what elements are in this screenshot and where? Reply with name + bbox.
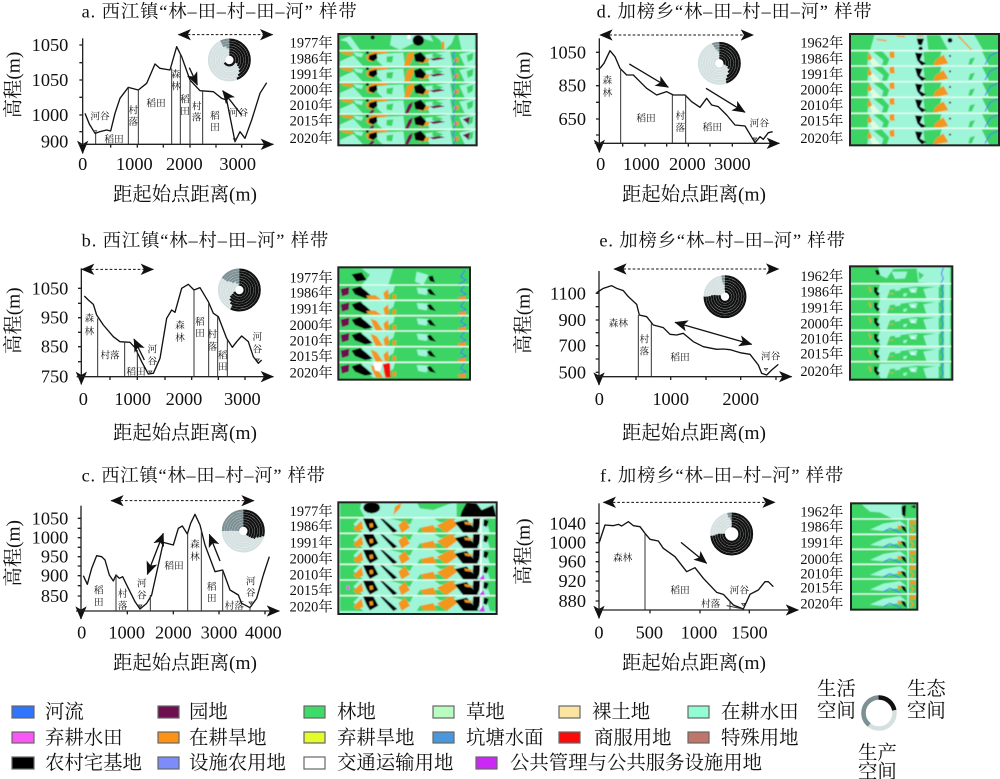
elevation profile b: 稻 bbox=[195, 317, 205, 328]
axes b: 高程(m) bbox=[2, 287, 24, 354]
axes c: 4000 bbox=[245, 622, 282, 642]
axes d: 距起始点距离(m) bbox=[622, 184, 766, 206]
legend: land use types bbox=[12, 701, 799, 774]
axes e: 1100 bbox=[550, 283, 586, 303]
axes e: 700 bbox=[558, 336, 586, 356]
elevation profile d: 林 bbox=[603, 87, 613, 99]
circular chart c bbox=[223, 511, 264, 551]
elevation profile b: 谷 bbox=[148, 356, 158, 367]
year labels c bbox=[290, 502, 333, 616]
year labels a: 1986年 bbox=[290, 49, 333, 67]
elevation profile b bbox=[84, 284, 263, 378]
axes c: 1000 bbox=[32, 528, 68, 548]
elevation profile e: 森林 bbox=[609, 318, 628, 330]
axes c bbox=[2, 506, 282, 674]
axes b: 3000 bbox=[224, 389, 261, 409]
elevation profile d: 稻田 bbox=[703, 123, 722, 134]
legend: land use types: 弃耕水田 bbox=[45, 727, 123, 749]
axes c: 高程(m) bbox=[2, 520, 24, 587]
elevation profile e: 村 bbox=[640, 334, 650, 346]
year labels b: 1986年 bbox=[290, 284, 333, 302]
year labels e bbox=[800, 267, 843, 380]
elevation profile f: 河谷 bbox=[730, 585, 749, 596]
year labels a: 1991年 bbox=[290, 65, 333, 83]
panel b: 西江镇 林村田河 transect bbox=[2, 231, 470, 444]
elevation profile a: 村 bbox=[129, 104, 139, 116]
elevation profile a: 河谷 bbox=[90, 111, 110, 122]
elevation profile c: 河 bbox=[137, 579, 147, 590]
axes c: 3000 bbox=[201, 622, 237, 642]
year labels e: 1991年 bbox=[800, 298, 843, 316]
year labels c: 2010年 bbox=[290, 565, 333, 583]
year labels b: 1977年 bbox=[290, 268, 333, 286]
axes c: 950 bbox=[41, 547, 68, 567]
legend: land use types: 在耕水田 bbox=[721, 701, 799, 723]
elevation profile e: 落 bbox=[640, 345, 650, 357]
panel d: 加榜乡 林田村田河 transect bbox=[512, 1, 999, 206]
elevation profile b: 稻田 bbox=[126, 367, 146, 378]
year labels f: 2000年 bbox=[800, 550, 843, 568]
legend: space ring bbox=[817, 678, 946, 779]
year labels d: 2015年 bbox=[800, 112, 843, 130]
legend: land use types: 弃耕旱地 bbox=[337, 727, 415, 749]
elevation profile d: 森 bbox=[603, 74, 613, 86]
elevation profile d: 河谷 bbox=[750, 119, 769, 130]
elevation profile d: 落 bbox=[676, 122, 686, 134]
year labels f: 2015年 bbox=[800, 579, 843, 597]
elevation profile d: 村 bbox=[676, 110, 686, 122]
year labels d: 1986年 bbox=[800, 49, 843, 67]
axes c: 900 bbox=[41, 566, 68, 586]
axes e: 1000 bbox=[652, 389, 689, 409]
elevation profile a bbox=[85, 47, 267, 145]
elevation profile c: 河 bbox=[246, 576, 256, 587]
land use map a bbox=[338, 33, 477, 146]
axes f: 1000 bbox=[549, 533, 586, 553]
panel f: 加榜乡 林田村河 transect bbox=[512, 466, 917, 674]
axes d: 650 bbox=[558, 109, 586, 129]
year labels b: 2015年 bbox=[290, 347, 333, 365]
axes c: 2000 bbox=[155, 622, 192, 642]
year labels e: 2000年 bbox=[800, 314, 843, 332]
elevation profile a: 河谷 bbox=[229, 108, 248, 119]
year labels d: 1962年 bbox=[800, 34, 843, 52]
year labels d: 2000年 bbox=[800, 80, 843, 98]
title d: d. 加榜乡“林–田–村–田–河” 样带 bbox=[597, 1, 872, 21]
elevation profile b: 落 bbox=[208, 341, 218, 353]
elevation profile c: 森 bbox=[190, 538, 200, 550]
axes a: 1000 bbox=[32, 105, 68, 125]
year labels f: 1962年 bbox=[800, 503, 843, 521]
direction arrows d bbox=[600, 35, 753, 112]
year labels e: 2010年 bbox=[800, 329, 843, 347]
axes b: 1000 bbox=[114, 389, 151, 409]
elevation profile c: 村落 bbox=[225, 600, 244, 612]
axes d bbox=[512, 38, 779, 206]
axes a: 高程(m) bbox=[2, 52, 24, 118]
elevation profile b: 稻 bbox=[218, 350, 228, 361]
elevation profile a: 村 bbox=[192, 100, 202, 112]
year labels c: 1986年 bbox=[290, 517, 333, 535]
axes b: 850 bbox=[41, 337, 68, 357]
legend: land use types: 裸土地 bbox=[592, 701, 650, 723]
circular chart e bbox=[705, 276, 745, 317]
year labels d: 2020年 bbox=[800, 129, 843, 147]
axes d: 850 bbox=[558, 76, 586, 96]
year labels a: 2020年 bbox=[290, 129, 333, 147]
title b: b. 西江镇“林–村–田–河” 样带 bbox=[82, 231, 328, 251]
year labels a: 2015年 bbox=[290, 112, 333, 130]
circular chart f bbox=[711, 514, 752, 554]
legend: land use types: 公共管理与公共服务设施用地 bbox=[510, 752, 762, 774]
axes a: 3000 bbox=[219, 154, 256, 174]
axes a: 2000 bbox=[166, 154, 203, 174]
legend: land use types: 草地 bbox=[466, 701, 505, 723]
axes d: 高程(m) bbox=[512, 52, 534, 118]
axes b: 2000 bbox=[166, 389, 202, 409]
year labels f: 1986年 bbox=[800, 518, 843, 536]
elevation profile a: 落 bbox=[129, 116, 139, 128]
panel c: 西江镇 林田村河 transect bbox=[2, 466, 497, 674]
axes a: 900 bbox=[41, 132, 68, 152]
direction arrows b bbox=[82, 269, 153, 360]
year labels b: 2010年 bbox=[290, 332, 333, 350]
title c: c. 西江镇“林–田–村–河” 样带 bbox=[82, 466, 325, 486]
axes a: 0 bbox=[78, 154, 87, 174]
elevation profile b: 林 bbox=[175, 332, 185, 344]
axes f: 0 bbox=[594, 622, 604, 642]
axes e: 距起始点距离(m) bbox=[622, 422, 766, 444]
elevation profile c: 落 bbox=[118, 600, 128, 612]
elevation profile b: 村 bbox=[208, 329, 218, 341]
elevation profile b: 林 bbox=[85, 325, 95, 337]
axes e: 0 bbox=[595, 389, 604, 409]
axes a bbox=[2, 35, 273, 206]
title a: a. 西江镇“林–田–村–田–河” 样带 bbox=[82, 1, 357, 21]
axes e: 2000 bbox=[722, 389, 759, 409]
year labels a: 2000年 bbox=[290, 80, 333, 98]
axes b: 1050 bbox=[32, 278, 68, 298]
axes c: 1050 bbox=[32, 508, 68, 528]
axes f: 1500 bbox=[731, 622, 768, 642]
panel a: 西江镇 林田村田河 transect bbox=[2, 1, 477, 206]
axes f: 高程(m) bbox=[512, 518, 534, 585]
circular chart d bbox=[699, 43, 740, 84]
legend: land use types: 在耕旱地 bbox=[189, 727, 267, 749]
elevation profile b: 田 bbox=[195, 329, 205, 340]
direction arrows f bbox=[603, 502, 775, 563]
year labels e: 1962年 bbox=[800, 267, 843, 285]
axes d: 0 bbox=[596, 154, 605, 174]
elevation profile c bbox=[83, 514, 269, 612]
elevation profile b: 村落 bbox=[100, 349, 120, 361]
legend: space ring: 生态 bbox=[907, 678, 946, 700]
year labels d: 1991年 bbox=[800, 65, 843, 83]
axes f: 960 bbox=[558, 552, 586, 572]
axes a: 1050 bbox=[32, 35, 68, 55]
panel e: 加榜乡 林村田河 transect bbox=[512, 231, 952, 444]
elevation profile b: 森 bbox=[175, 319, 185, 331]
axes d: 3000 bbox=[714, 154, 751, 174]
elevation profile a: 稻 bbox=[210, 111, 220, 122]
circular chart b bbox=[219, 270, 260, 310]
axes d: 2000 bbox=[669, 154, 706, 174]
land use map e bbox=[850, 266, 952, 380]
axes f: 1040 bbox=[549, 513, 586, 533]
year labels a bbox=[290, 34, 333, 147]
axes b: 750 bbox=[41, 367, 68, 387]
elevation profile c: 稻 bbox=[207, 582, 217, 593]
year labels f bbox=[800, 503, 843, 612]
legend: space ring: 空间 bbox=[907, 700, 946, 722]
year labels c: 2020年 bbox=[290, 598, 333, 616]
legend: land use types: 特殊用地 bbox=[721, 727, 799, 749]
year labels c: 2000年 bbox=[290, 549, 333, 567]
direction arrows e bbox=[614, 269, 779, 344]
year labels f: 1991年 bbox=[800, 533, 843, 551]
legend: space ring: 生产 bbox=[858, 742, 897, 764]
legend: land use types: 商服用地 bbox=[594, 727, 672, 749]
axes e: 900 bbox=[558, 310, 586, 330]
axes f: 1000 bbox=[681, 622, 717, 642]
axes a: 1000 bbox=[116, 154, 153, 174]
title f: f. 加榜乡“林–田–村–河” 样带 bbox=[600, 466, 843, 486]
axes c: 1000 bbox=[108, 622, 145, 642]
elevation profile c: 稻 bbox=[94, 585, 104, 596]
axes c: 0 bbox=[77, 622, 86, 642]
year labels a: 2010年 bbox=[290, 96, 333, 114]
axes f: 920 bbox=[558, 571, 586, 591]
year labels c: 2015年 bbox=[290, 581, 333, 599]
land use map d bbox=[850, 33, 999, 146]
year labels e: 1986年 bbox=[800, 283, 843, 301]
elevation profile f bbox=[599, 522, 773, 610]
elevation profile b: 田 bbox=[218, 362, 227, 373]
legend: land use types: 林地 bbox=[337, 701, 376, 723]
year labels e: 2020年 bbox=[800, 362, 843, 380]
direction arrows a bbox=[178, 35, 273, 115]
title e: e. 加榜乡“林–村–田–河” 样带 bbox=[599, 231, 845, 251]
land use map c bbox=[338, 502, 497, 614]
elevation profile f: 森林 bbox=[613, 552, 633, 564]
elevation profile a: 森 bbox=[171, 68, 181, 80]
year labels e: 2015年 bbox=[800, 344, 843, 362]
axes e: 高程(m) bbox=[512, 287, 534, 354]
axes e bbox=[512, 271, 792, 444]
axes a: 距起始点距离(m) bbox=[113, 184, 257, 206]
elevation profile a: 林 bbox=[171, 80, 181, 92]
year labels a: 1977年 bbox=[290, 34, 333, 52]
axes b bbox=[2, 268, 273, 444]
land use map f bbox=[851, 503, 917, 610]
year labels b: 2000年 bbox=[290, 316, 333, 334]
elevation profile c: 田 bbox=[94, 597, 103, 608]
elevation profile c: 谷 bbox=[246, 588, 256, 599]
direction arrows c bbox=[111, 501, 254, 574]
legend: land use types: 农村宅基地 bbox=[45, 752, 142, 774]
legend: land use types: 河流 bbox=[45, 701, 84, 723]
circular chart a bbox=[209, 40, 250, 80]
elevation profile e: 稻田 bbox=[670, 353, 690, 364]
axes c: 850 bbox=[41, 586, 68, 606]
elevation profile c: 田 bbox=[207, 594, 216, 605]
elevation profile c: 稻田 bbox=[164, 561, 184, 572]
elevation profile d bbox=[600, 51, 773, 143]
elevation profile f: 稻田 bbox=[670, 586, 690, 597]
year labels c: 1991年 bbox=[290, 533, 333, 551]
year labels c: 1977年 bbox=[290, 502, 333, 520]
legend: land use types: 园地 bbox=[189, 701, 228, 723]
elevation profile c: 村 bbox=[118, 588, 128, 600]
elevation profile f: 村落 bbox=[701, 598, 721, 610]
axes f bbox=[512, 503, 798, 674]
axes a: 1050 bbox=[32, 70, 68, 90]
axes f: 880 bbox=[558, 591, 586, 611]
elevation profile a: 稻田 bbox=[104, 134, 124, 145]
elevation profile e: 河谷 bbox=[761, 351, 781, 362]
legend: land use types: 设施农用地 bbox=[189, 752, 286, 774]
year labels f: 2010年 bbox=[800, 564, 843, 582]
elevation profile b: 河 bbox=[148, 344, 158, 355]
elevation profile a: 田 bbox=[180, 106, 190, 117]
axes f: 500 bbox=[636, 622, 663, 642]
elevation profile a: 稻田 bbox=[146, 99, 166, 110]
legend: land use types: 坑塘水面 bbox=[466, 727, 544, 749]
land use map b bbox=[338, 267, 470, 380]
year labels b: 2020年 bbox=[290, 364, 333, 382]
axes b: 距起始点距离(m) bbox=[113, 422, 257, 444]
elevation profile a: 稻 bbox=[180, 95, 190, 106]
axes e: 500 bbox=[558, 362, 586, 382]
axes d: 1050 bbox=[549, 42, 586, 62]
year labels d: 2010年 bbox=[800, 96, 843, 114]
axes f: 距起始点距离(m) bbox=[622, 652, 766, 674]
axes b: 950 bbox=[41, 308, 68, 328]
elevation profile b: 谷 bbox=[253, 344, 263, 355]
elevation profile b: 森 bbox=[85, 313, 95, 325]
axes c: 距起始点距离(m) bbox=[113, 652, 257, 674]
elevation profile a: 田 bbox=[210, 123, 220, 134]
elevation profile e bbox=[597, 286, 781, 377]
legend: land use types: 交通运输用地 bbox=[337, 752, 453, 774]
year labels b bbox=[290, 268, 333, 382]
elevation profile c: 谷 bbox=[137, 590, 147, 601]
legend: space ring: 生活 bbox=[817, 678, 856, 700]
axes b: 0 bbox=[79, 389, 88, 409]
elevation profile b: 河 bbox=[253, 332, 263, 343]
elevation profile d: 稻田 bbox=[636, 114, 656, 125]
axes d: 1000 bbox=[623, 154, 660, 174]
year labels b: 1991年 bbox=[290, 299, 333, 317]
legend: space ring: 空间 bbox=[817, 700, 856, 722]
year labels f: 2020年 bbox=[800, 594, 843, 612]
elevation profile a: 落 bbox=[192, 112, 202, 124]
year labels d bbox=[800, 34, 843, 147]
elevation profile c: 林 bbox=[190, 551, 200, 563]
